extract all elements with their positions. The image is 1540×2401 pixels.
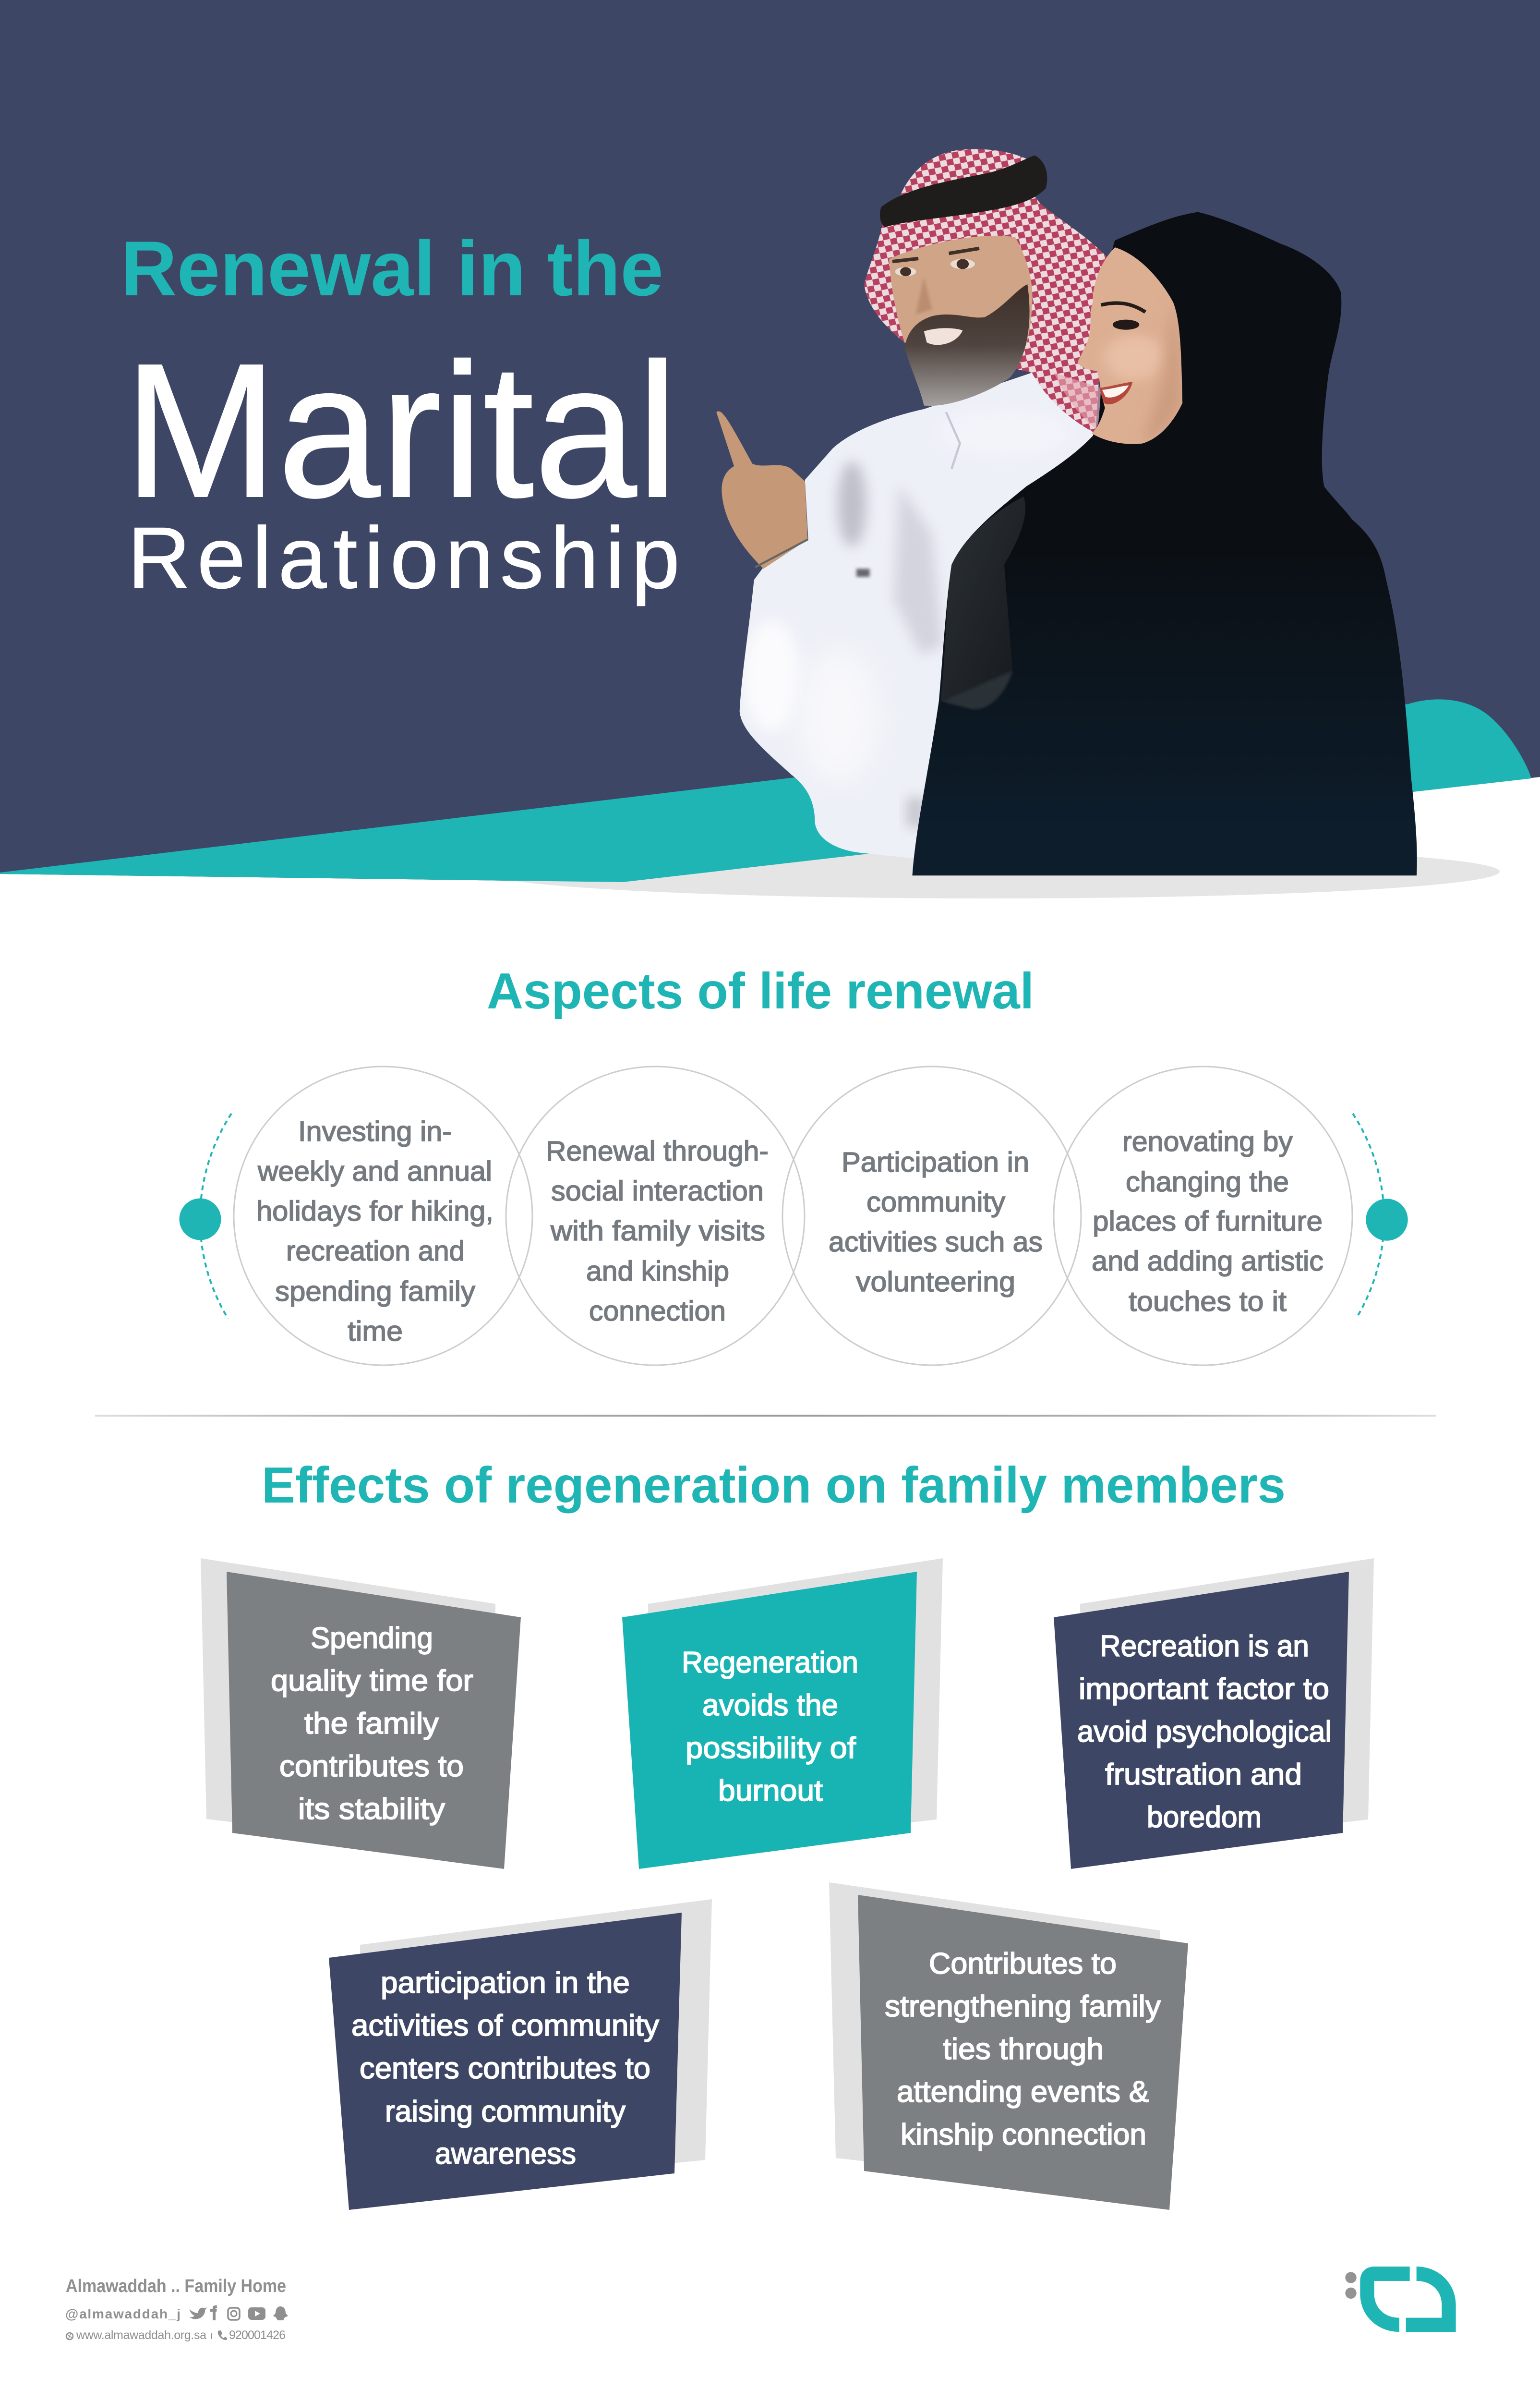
photo: man and woman: [716, 149, 1417, 875]
agal band: [880, 156, 1047, 227]
teal diagonal band: [0, 699, 1531, 882]
card 2: burnout: burnout: [718, 1774, 823, 1807]
card 1: family stability: contributes to: [279, 1750, 464, 1783]
card 5: family ties: kinship connection: [901, 2118, 1146, 2151]
title line: Renewal in the: Renewal in the: [121, 225, 663, 312]
card 1: family stability: its stability: [298, 1793, 445, 1826]
circle 4: renovating: and adding artistic: [1092, 1246, 1323, 1277]
circle 1: holidays: [234, 1067, 532, 1365]
circle 3: community activities: Participation in: [842, 1147, 1029, 1178]
card 1: family stability: quality time for: [271, 1664, 473, 1698]
icon: twitter: [189, 2307, 207, 2319]
circle 4: renovating: renovating by: [1122, 1126, 1293, 1157]
card 4: community awareness: activities of community: [351, 2009, 659, 2042]
footer contact block: [65, 2276, 288, 2342]
card 5: family ties: Contributes to: [929, 1947, 1117, 1980]
circle 3: community activities: [782, 1067, 1081, 1365]
woman eye and brow: [1113, 320, 1139, 330]
icon: phone: [218, 2330, 227, 2340]
circle 4: renovating: [1054, 1067, 1352, 1365]
card 2: burnout: [622, 1558, 943, 1869]
card 2: burnout: possibility of: [686, 1732, 856, 1765]
icon: globe: [66, 2333, 73, 2340]
card 5: family ties: ties through: [943, 2033, 1104, 2066]
card 5: family ties: attending events &: [897, 2075, 1149, 2109]
hand pointing: [716, 412, 808, 569]
card 4: community awareness: centers contributes to: [360, 2052, 650, 2085]
man face: [889, 236, 1033, 358]
circle 4: renovating: touches to it: [1129, 1286, 1287, 1317]
card 4: community awareness: [329, 1899, 712, 2210]
card 4: community awareness: participation in the: [381, 1966, 630, 2000]
ghutra headdress: [864, 186, 1107, 433]
icon: snapchat: [273, 2306, 288, 2320]
circle 2: social interaction: and kinship: [586, 1256, 729, 1287]
beard: [904, 284, 1030, 406]
circle 3: community activities: community: [866, 1187, 1005, 1218]
woman face: [1078, 247, 1182, 444]
circle 4: renovating: places of furniture: [1093, 1206, 1323, 1237]
circle 2: social interaction: [506, 1067, 805, 1365]
card 5: family ties: strengthening family: [885, 1990, 1161, 2023]
circle 1: holidays: recreation and: [286, 1236, 465, 1267]
circle 3: community activities: activities such as: [829, 1226, 1043, 1258]
heading: Effects of regeneration on family members: Effects of regeneration on family members: [262, 1457, 1286, 1514]
title line: Relationship: Relationship: [128, 509, 680, 606]
man eyes: [895, 267, 916, 276]
woman smile: [1099, 382, 1132, 404]
icon: instagram: [228, 2308, 240, 2320]
card 3: psychological frustration: Recreation is an: [1100, 1630, 1309, 1663]
organisation name: Almawaddah .. Family Home: [66, 2276, 286, 2296]
card 4: community awareness: awareness: [435, 2137, 576, 2171]
man in white thobe: [716, 149, 1107, 859]
panel: aspects of life renewal circles: [180, 1067, 1408, 1365]
hero background panel: [0, 0, 1540, 898]
circle 1: holidays: Investing in-: [298, 1116, 452, 1147]
circle 2: social interaction: Renewal through-: [546, 1136, 769, 1167]
title: [121, 225, 680, 606]
card 3: psychological frustration: boredom: [1147, 1801, 1262, 1834]
card 1: family stability: Spending: [311, 1622, 433, 1655]
right dashed arc and dot: [1353, 1114, 1408, 1318]
ground shadow ellipse: [482, 845, 1500, 898]
woman in black abaya: [912, 212, 1417, 875]
card 2: burnout: avoids the: [702, 1689, 838, 1722]
card 1: family stability: [201, 1558, 521, 1869]
circle 2: social interaction: connection: [589, 1296, 726, 1327]
title line: Marital: Marital: [124, 324, 678, 537]
circle 1: holidays: time: [348, 1316, 403, 1347]
card 1: family stability: the family: [304, 1707, 439, 1740]
logo: [1345, 2267, 1456, 2332]
circle 1: holidays: weekly and annual: [257, 1156, 492, 1187]
phone number: 920001426: [229, 2328, 286, 2342]
icon: youtube: [248, 2307, 265, 2320]
card 3: psychological frustration: [1054, 1558, 1374, 1869]
card 3: psychological frustration: avoid psychological: [1077, 1715, 1332, 1748]
icon: facebook: [210, 2305, 217, 2320]
heading: Aspects of life renewal: Aspects of life renewal: [487, 963, 1034, 1019]
circle 1: holidays: spending family: [275, 1276, 475, 1307]
website: www.almawaddah.org.sa: [76, 2328, 206, 2342]
card 5: family ties: [829, 1882, 1188, 2210]
left dashed arc and dot: [180, 1114, 231, 1319]
card 3: psychological frustration: important factor to: [1079, 1673, 1329, 1706]
card 3: psychological frustration: frustration and: [1105, 1758, 1302, 1791]
circle 3: community activities: volunteering: [856, 1266, 1015, 1298]
card 4: community awareness: raising community: [385, 2095, 626, 2128]
circle 4: renovating: changing the: [1126, 1166, 1289, 1198]
circle 2: social interaction: with family visits: [550, 1215, 765, 1247]
card 2: burnout: Regeneration: [682, 1646, 858, 1679]
social handle: @almawaddah_j: [65, 2306, 180, 2321]
circle 1: holidays: holidays for hiking,: [256, 1196, 493, 1227]
circle 2: social interaction: social interaction: [551, 1176, 764, 1207]
